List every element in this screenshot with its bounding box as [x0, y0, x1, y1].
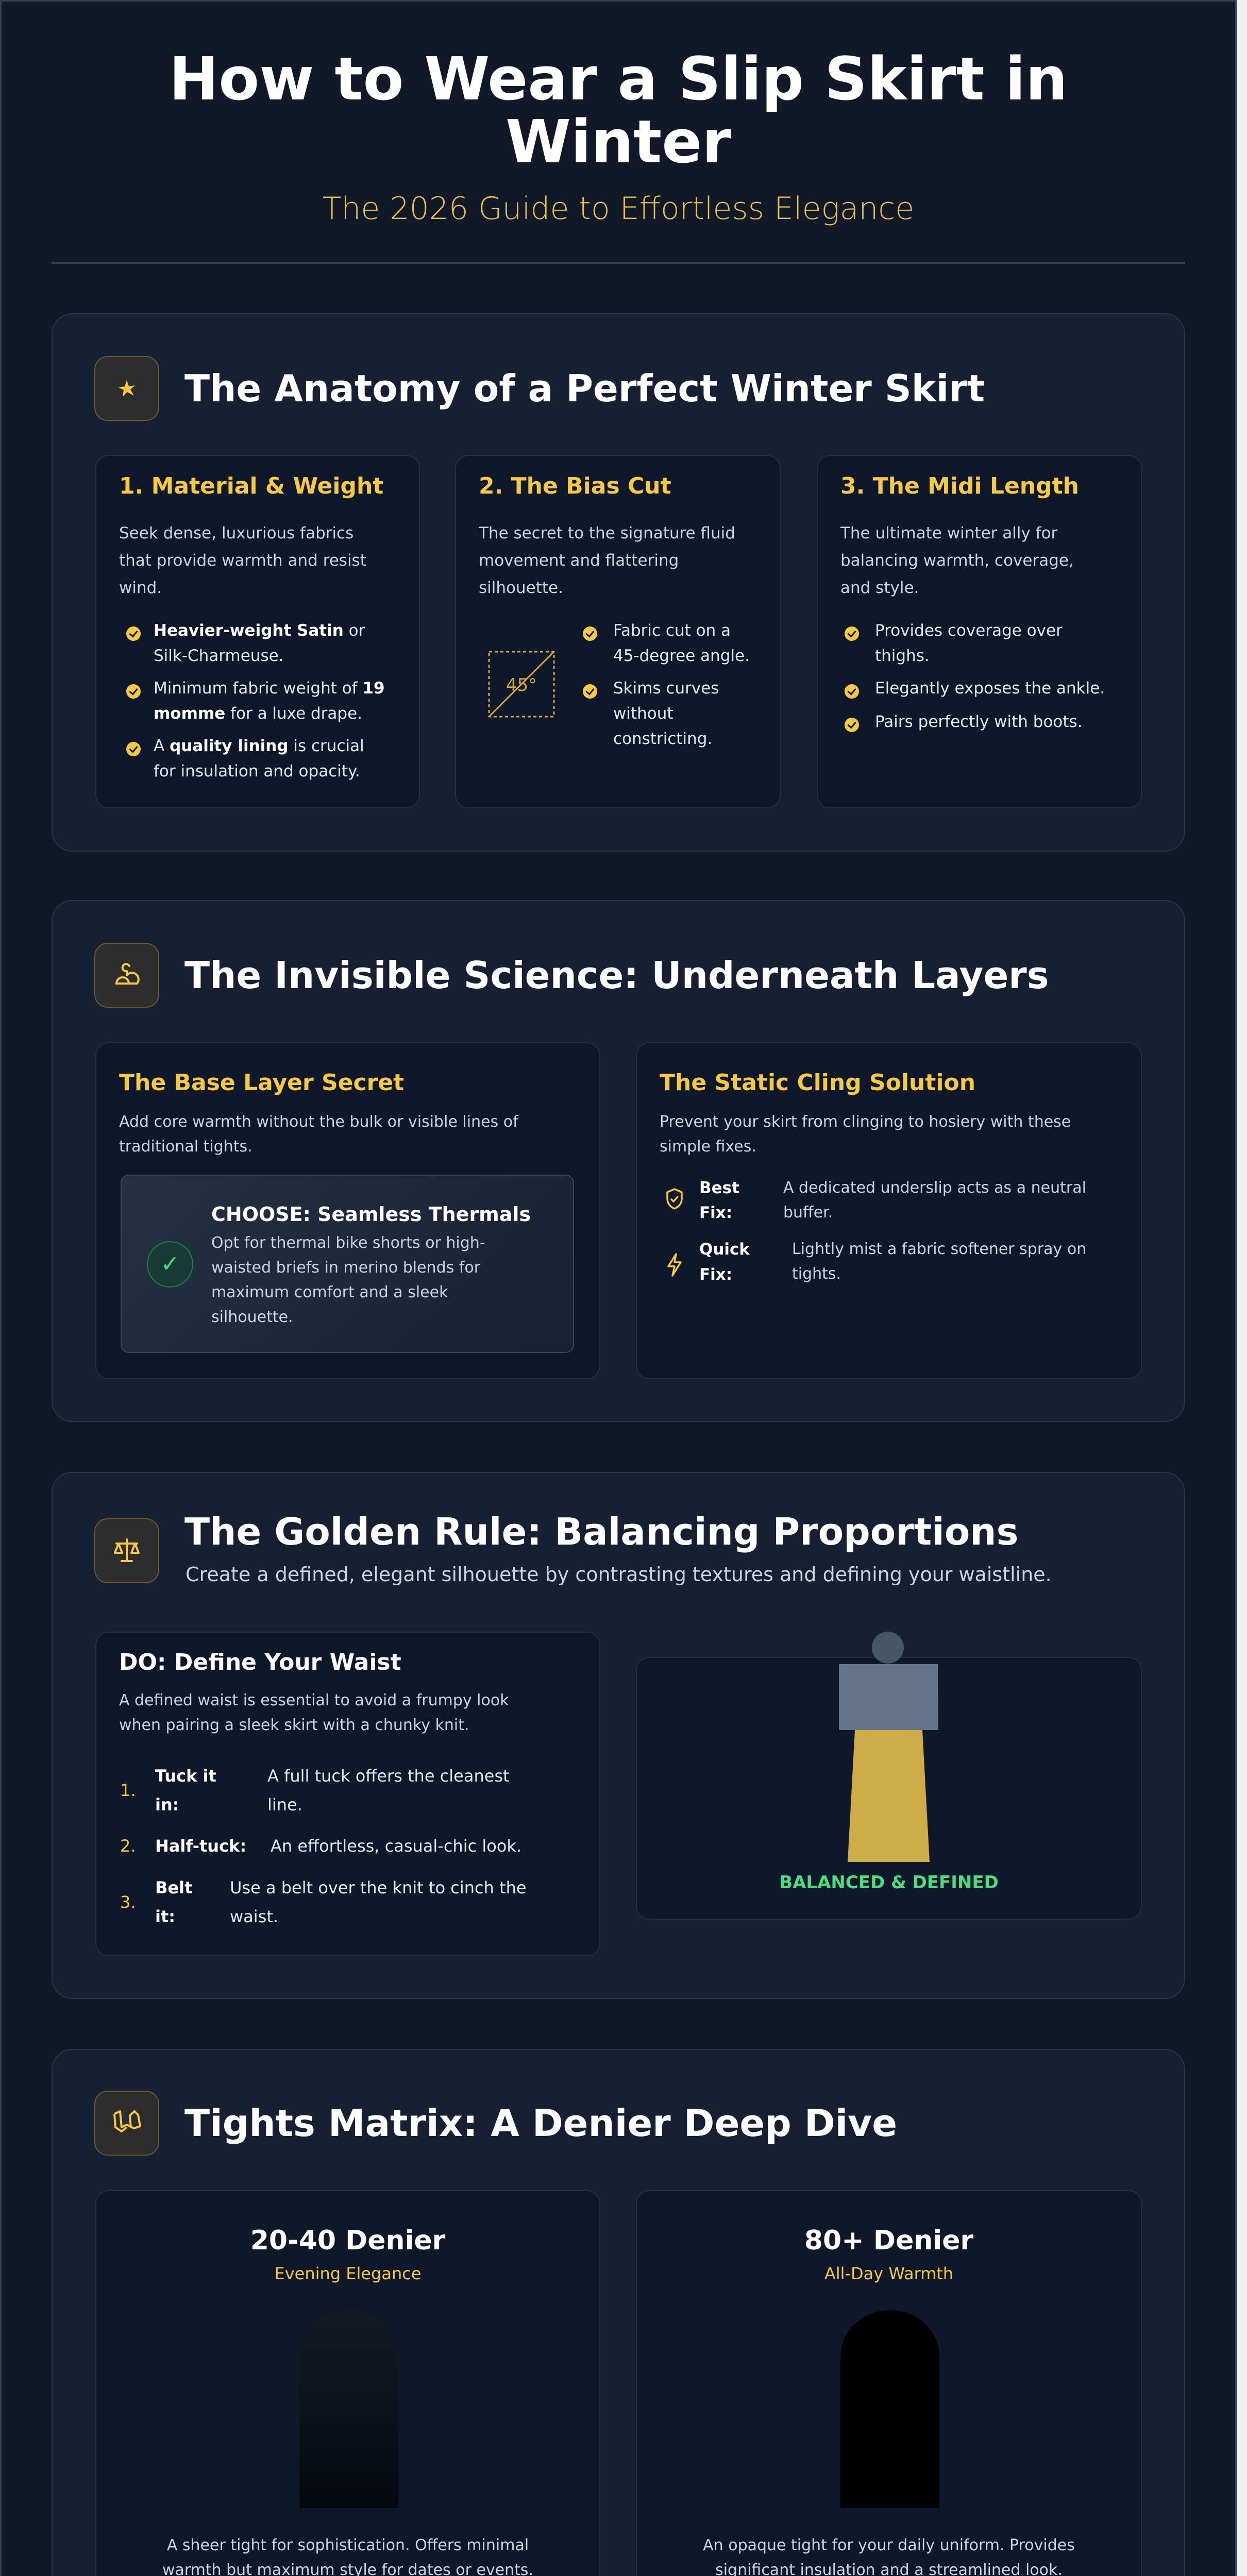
- callout: seamless thermals: waisted briefs in merino blends for: [211, 1259, 480, 1277]
- card body: simple fixes.: [660, 1138, 756, 1156]
- card: bias cut: [455, 455, 781, 808]
- list: [120, 1766, 527, 1926]
- icon: scales: [94, 1518, 159, 1583]
- subheading: Create a defined, elegant silhouette by contrasting textures and defining your waistline.: [186, 1563, 1052, 1586]
- icon: map: [94, 2091, 159, 2156]
- bullets: Elegantly exposes the ankle.: [875, 679, 1105, 698]
- card body: The secret to the signature fluid: [479, 524, 735, 543]
- card body: A defined waist is essential to avoid a frumpy look: [119, 1691, 509, 1709]
- card body: silhouette.: [479, 579, 563, 597]
- card body: Prevent your skirt from clinging to hosiery with these: [660, 1113, 1071, 1131]
- card: 80+ denier: [636, 2190, 1142, 2576]
- figure: balanced silhouette: BALANCED & DEFINED: [779, 1872, 999, 1893]
- bullets: Heavier-weight Satin or: [154, 621, 365, 640]
- subtitle: The 2026 Guide to Effortless Elegance: [323, 191, 914, 227]
- bullets: thighs.: [875, 647, 930, 665]
- panel: anatomy: [52, 313, 1185, 852]
- title: Winter: [505, 108, 731, 177]
- figure: balanced silhouette: [779, 1632, 999, 1893]
- bullets: Minimum fabric weight of 19: [154, 679, 385, 698]
- callout: seamless thermals: Opt for thermal bike shorts or high-: [211, 1234, 485, 1252]
- card: 80+ denier: 80+ Denier: [804, 2225, 973, 2256]
- diagram: 45 degree: [488, 651, 554, 717]
- card body: [478, 524, 735, 597]
- card body: that provide warmth and resist: [119, 551, 366, 570]
- bullets: [583, 621, 750, 748]
- list: An effortless, casual-chic look.: [271, 1836, 521, 1856]
- callout: seamless thermals: silhouette.: [211, 1308, 293, 1326]
- bullets: Pairs perfectly with boots.: [875, 713, 1083, 731]
- heading: tights matrix: Tights Matrix: A Denier Deep Dive: [184, 2102, 897, 2145]
- card: define waist: [95, 1632, 600, 1956]
- card heading: 3. The Midi Length: [840, 473, 1079, 499]
- list: Use a belt over the knit to cinch the: [230, 1878, 527, 1897]
- card: midi length: [817, 455, 1142, 808]
- list: Half-tuck:: [155, 1836, 246, 1856]
- card body: Seek dense, luxurious fabrics: [119, 524, 353, 543]
- diagram: 45 degree: 45°: [506, 675, 537, 696]
- bullets: Provides coverage over: [875, 621, 1063, 640]
- list: it:: [155, 1907, 175, 1926]
- card body: [660, 1113, 1071, 1156]
- icon: sparkle: [94, 356, 159, 421]
- card: 20-40 denier: 20-40 Denier: [250, 2225, 445, 2256]
- list: 2.: [120, 1836, 136, 1856]
- card body: [840, 524, 1074, 597]
- card body: balancing warmth, coverage,: [840, 551, 1074, 570]
- bullets: A quality lining is crucial: [154, 737, 364, 755]
- card body: [119, 1691, 509, 1734]
- fix: best: Fix:: [699, 1204, 732, 1222]
- card body: wind.: [119, 579, 162, 597]
- list: in:: [155, 1795, 179, 1815]
- card: 20-40 denier: A sheer tight for sophistication. Offers minimal: [167, 2536, 529, 2554]
- panel: underneath layers: [52, 900, 1185, 1422]
- card: base layer: [95, 1042, 600, 1379]
- bullets: momme for a luxe drape.: [154, 704, 362, 723]
- fix: quick: Lightly mist a fabric softener spray on: [792, 1240, 1086, 1258]
- icon: check circle: ✓: [161, 1251, 179, 1277]
- heading: golden rule: The Golden Rule: Balancing Proportions: [184, 1510, 1018, 1553]
- bullets: for insulation and opacity.: [154, 762, 360, 781]
- card body: when pairing a sleek skirt with a chunky knit.: [119, 1716, 469, 1734]
- bullets: without: [613, 704, 673, 723]
- icon: opaque tight: [840, 2310, 939, 2508]
- callout: seamless thermals: maximum comfort and a sleek: [211, 1283, 448, 1301]
- card heading: DO: Define Your Waist: [119, 1649, 401, 1675]
- heading: anatomy: The Anatomy of a Perfect Winter Skirt: [184, 367, 985, 410]
- bullets: 45-degree angle.: [613, 647, 750, 665]
- card heading: The Static Cling Solution: [660, 1070, 975, 1096]
- card: 80+ denier: All-Day Warmth: [824, 2264, 953, 2283]
- fix: best: [666, 1179, 1086, 1222]
- fix: quick: tights.: [792, 1265, 841, 1283]
- card heading: 1. Material & Weight: [119, 473, 383, 499]
- card: 20-40 denier: [95, 2190, 600, 2576]
- fix: best: Best: [699, 1179, 739, 1197]
- fix: quick: Fix:: [699, 1265, 732, 1284]
- bullets: [126, 621, 385, 781]
- card: balanced figure: [636, 1657, 1142, 1920]
- card: static cling: [636, 1042, 1142, 1379]
- fix: quick: [667, 1240, 1086, 1284]
- bullets: Skims curves: [613, 679, 719, 698]
- fix: best: buffer.: [783, 1204, 833, 1222]
- icon: sheer tight: [299, 2310, 398, 2508]
- fix: quick: Quick: [699, 1240, 750, 1259]
- card: 80+ denier: An opaque tight for your daily uniform. Provides: [703, 2536, 1075, 2554]
- icon: check circle: [147, 1241, 193, 1287]
- list: A full tuck offers the cleanest: [267, 1766, 510, 1786]
- card body: movement and flattering: [479, 551, 679, 570]
- callout: seamless thermals: [121, 1175, 574, 1353]
- panel: tights matrix: [52, 2049, 1185, 2576]
- card body: The ultimate winter ally for: [840, 524, 1057, 543]
- list: 1.: [120, 1781, 136, 1800]
- fix: best: A dedicated underslip acts as a neutral: [783, 1179, 1086, 1197]
- card body: traditional tights.: [119, 1138, 252, 1156]
- list: Tuck it: [155, 1766, 216, 1786]
- card body: [119, 1113, 518, 1156]
- card heading: 2. The Bias Cut: [479, 473, 671, 499]
- card body: and style.: [840, 579, 919, 597]
- title: [169, 45, 1068, 177]
- panel: golden rule: [52, 1472, 1185, 1999]
- card heading: The Base Layer Secret: [119, 1070, 404, 1096]
- card body: [119, 524, 366, 597]
- bullets: Silk-Charmeuse.: [154, 647, 284, 665]
- list: line.: [267, 1795, 302, 1815]
- card: material: [95, 455, 420, 808]
- list: Belt: [155, 1878, 192, 1897]
- list: 3.: [120, 1892, 136, 1912]
- list: waist.: [230, 1907, 278, 1926]
- callout: seamless thermals: CHOOSE: Seamless Thermals: [211, 1203, 531, 1226]
- icon: hanger: [94, 943, 159, 1008]
- bullets: Fabric cut on a: [613, 621, 731, 640]
- heading: invisible science: The Invisible Science: Underneath Layers: [184, 954, 1049, 997]
- card: 20-40 denier: Evening Elegance: [274, 2264, 422, 2283]
- bullets: constricting.: [613, 730, 712, 748]
- card body: Add core warmth without the bulk or visible lines of: [119, 1113, 518, 1131]
- title: How to Wear a Slip Skirt in: [169, 45, 1068, 114]
- bullets: [845, 621, 1105, 732]
